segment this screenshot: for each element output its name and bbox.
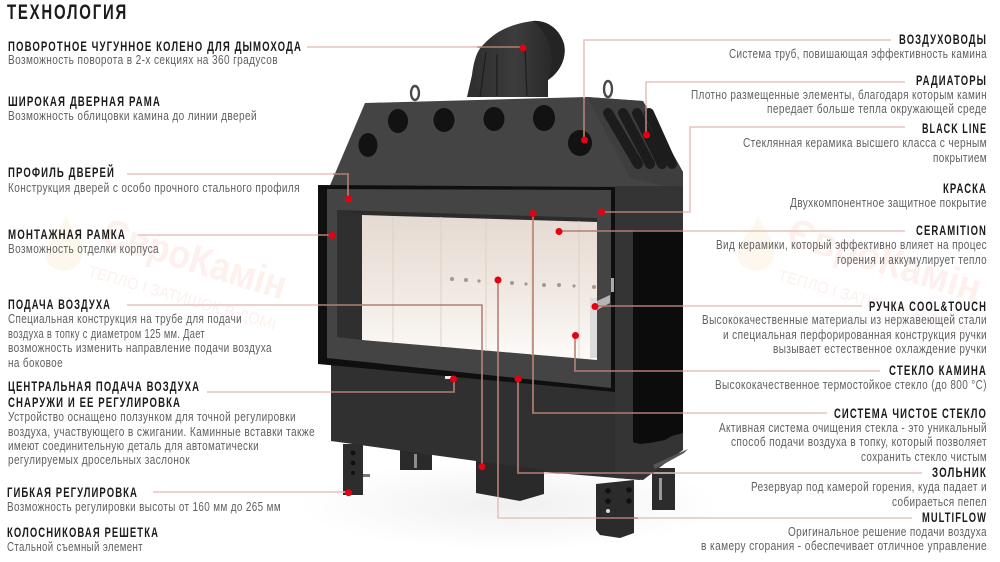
flue details [480, 48, 527, 97]
hood right slope [587, 97, 683, 190]
callout: grate: КОЛОСНИКОВАЯ РЕШЕТКА [7, 524, 159, 540]
watermark: right logo [737, 211, 986, 338]
radiator fins [608, 113, 672, 164]
callout: mounting frame [8, 226, 159, 256]
callout: central air supply: воздуха, участвующего в сжигании. Каминные вставки также [8, 424, 315, 439]
callout: wide door frame: ШИРОКАЯ ДВЕРНАЯ РАМА [8, 93, 161, 109]
door outer frame [318, 185, 615, 392]
callout: central air supply: имеют соединительную деталь для автоматически [8, 438, 259, 453]
callout: central air supply [8, 378, 315, 467]
door frame [327, 189, 611, 388]
callout: door profile: Конструкция дверей с особо прочного стального профиля [8, 180, 300, 195]
callout: paint [790, 180, 987, 210]
window side wall [337, 210, 362, 340]
callout: air supply: ПОДАЧА ВОЗДУХА [8, 296, 111, 312]
title: ТЕХНОЛОГИЯ [7, 1, 128, 24]
callout: air supply: на боковое [8, 355, 63, 370]
callout: mounting frame: МОНТАЖНАЯ РАМКА [8, 226, 126, 242]
air duct holes [358, 105, 592, 157]
flue flange [533, 21, 565, 80]
window rivets [450, 277, 596, 289]
callout: flue elbow: ПОВОРОТНОЕ ЧУГУННОЕ КОЛЕНО ДЛЯ ДЫМОХОДА [8, 38, 302, 54]
floor shadow [300, 460, 720, 550]
leader lines (over stove) [318, 46, 683, 518]
illustration: fireplace insert [318, 21, 688, 538]
watermark: left logo: ТЕПЛО І ЗАТИШОК В ДОМІ [86, 264, 278, 334]
hood [328, 97, 683, 195]
callout: central air supply: регулируемых дросельных заслонок [8, 452, 190, 467]
callout: air supply: возможность изменить направление подачи воздуха [8, 340, 272, 355]
callout: flue elbow: Возможность поворота в 2-х секциях на 360 градусов [8, 52, 278, 67]
front right leg [596, 480, 634, 538]
callout: clean glass system [719, 405, 987, 464]
callout: ash pan [751, 464, 987, 509]
right column callouts [691, 31, 987, 553]
flue elbow [467, 21, 565, 97]
callout: radiators [691, 72, 987, 116]
callout: central air supply: СНАРУЖИ И ЕЕ РЕГУЛИРОВКА [8, 394, 181, 410]
callout: grate: Стальной съемный элемент [7, 539, 143, 554]
callout: air supply: Специальная конструкция на трубе для подачи [8, 311, 242, 326]
callout: glass [715, 362, 987, 392]
leader lines (on white) [127, 40, 922, 518]
callout: grate [7, 524, 159, 554]
watermark: left logo [45, 211, 292, 334]
window panels [393, 216, 579, 358]
side panel [615, 186, 683, 480]
front left leg [343, 444, 370, 495]
callout: cool touch handle [702, 298, 987, 356]
callout: door profile [8, 163, 300, 195]
callout: wide door frame: Возможность облицовки камина до линии дверей [8, 108, 257, 123]
callout: air supply [8, 296, 272, 370]
marker dots [328, 44, 650, 496]
watermark: right logo: ЄвроКамін [782, 211, 986, 311]
back legs [400, 450, 675, 510]
callout: black line [743, 120, 987, 165]
lower body [331, 360, 640, 480]
callout: wide door frame [8, 93, 257, 123]
callout: flexible adjustment [7, 484, 281, 514]
callout: flue elbow [8, 38, 302, 67]
side black fins [633, 230, 683, 444]
callout: flexible adjustment: ГИБКАЯ РЕГУЛИРОВКА [7, 484, 138, 500]
right ledge [653, 449, 688, 469]
callout: flexible adjustment: Возможность регулировки высоты от 160 мм до 265 мм [7, 499, 281, 514]
callout: mounting frame: Возможность отделки корпуса [8, 241, 159, 256]
air slider [445, 376, 455, 379]
window back wall [362, 215, 597, 360]
callout: ceramition [716, 222, 987, 267]
lifting rings [411, 81, 612, 100]
callout: door profile: ПРОФИЛЬ ДВЕРЕЙ [8, 163, 115, 180]
door handle [590, 278, 614, 358]
callout: air ducts [729, 31, 987, 61]
window top strip [337, 210, 597, 223]
left column callouts [7, 38, 315, 554]
callout: multiflow [701, 509, 987, 553]
watermark: left logo: ЄвроКамін [97, 211, 292, 308]
callout: central air supply: Устройство оснащено ползунком для точной регулировки [8, 409, 296, 424]
callout: air supply: воздуха в топку с диаметром 125 мм. Дает [8, 326, 205, 341]
callout: central air supply: ЦЕНТРАЛЬНАЯ ПОДАЧА ВОЗДУХА [8, 378, 200, 394]
ash box [476, 461, 544, 501]
watermark: right logo: ТЕПЛО І ЗАТИШОК В ДОМІ [776, 268, 968, 338]
